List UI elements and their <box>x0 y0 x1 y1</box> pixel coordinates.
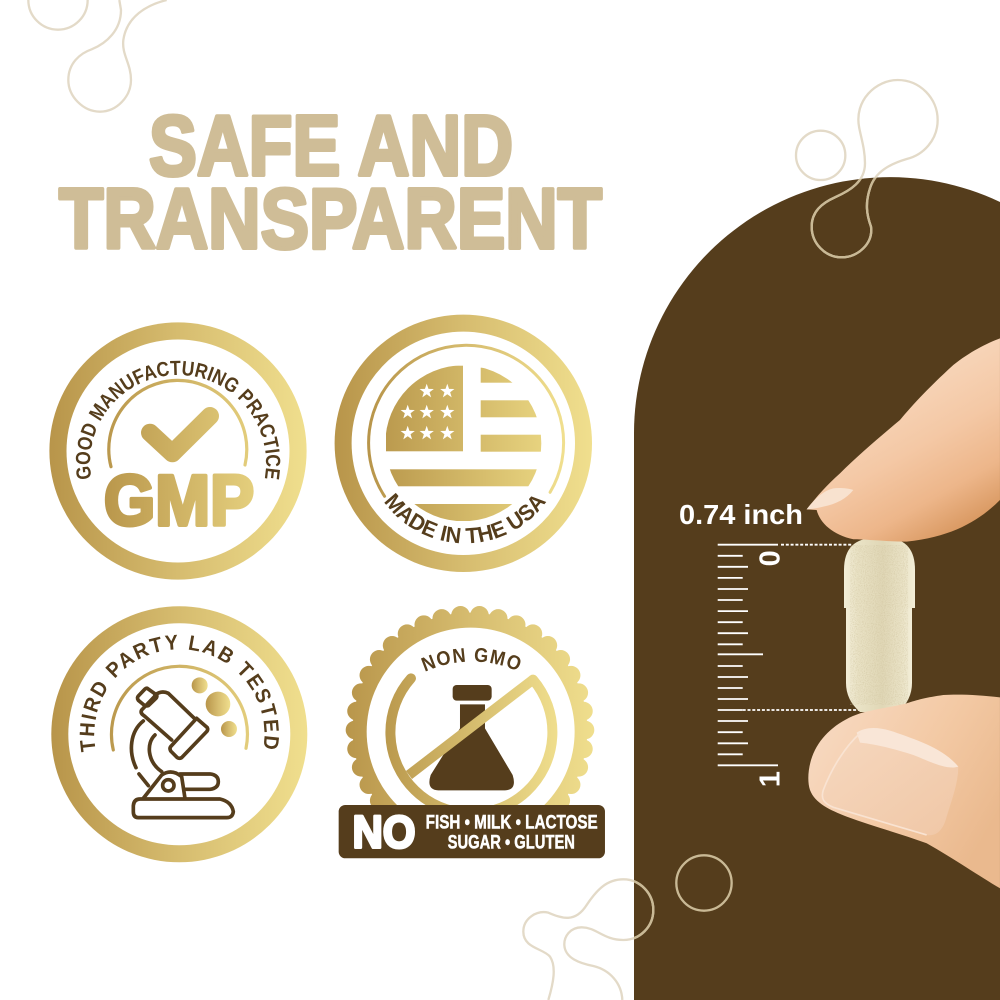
prohibition slash <box>409 680 533 775</box>
ruler number 1: 1 <box>754 771 786 787</box>
GMP letters: GMP <box>104 462 254 541</box>
badge: GMP <box>49 322 307 580</box>
capsule body <box>846 600 912 712</box>
capsule texture <box>850 545 908 705</box>
ruler number 0: 0 <box>754 550 786 566</box>
icon: check mark <box>150 416 210 453</box>
thin arc <box>111 666 247 750</box>
thin arc <box>369 345 564 496</box>
gold ring <box>49 322 307 580</box>
bottom finger <box>808 695 1000 888</box>
fingernail <box>807 488 853 509</box>
icon: flag <box>380 366 550 521</box>
capsule cap <box>844 538 915 608</box>
heading: TRANSPARENT <box>59 172 602 267</box>
curved label: GOOD MANUFACTURING PRACTICE <box>76 360 280 480</box>
decorative squiggles top left <box>28 0 167 112</box>
icon: gold bubbles <box>192 677 237 737</box>
nail highlight <box>857 728 958 768</box>
badge: non GMO <box>338 606 605 858</box>
curved label: MADE IN THE USA <box>384 492 546 544</box>
icon: microscope <box>131 688 233 818</box>
badge: made in the USA <box>334 314 592 572</box>
heading <box>59 99 602 267</box>
inner disc <box>66 340 290 562</box>
measurement label: 0.74 inch <box>679 499 803 530</box>
squiggle overlay on arch <box>634 178 877 940</box>
inner disc <box>68 623 290 845</box>
scalloped seal <box>346 606 594 805</box>
prohibition ring <box>390 678 552 813</box>
flag stars <box>401 384 454 439</box>
curved label: THIRD PARTY LAB TESTED <box>80 634 279 752</box>
capsule <box>844 538 915 712</box>
finger shape <box>808 695 1000 888</box>
icon: flask <box>429 685 514 790</box>
banner list line 1: FISH • MILK • LACTOSE <box>426 812 598 833</box>
badge: third party lab tested <box>51 606 308 862</box>
nail rim <box>822 733 927 835</box>
top finger <box>807 338 1000 542</box>
decorative squiggles bottom <box>523 855 732 1000</box>
heading: SAFE AND <box>149 99 513 194</box>
decorative squiggles top right <box>796 80 938 257</box>
panel: dark arch <box>634 177 1000 1000</box>
finger shape <box>807 338 1000 542</box>
thin arc <box>109 380 247 467</box>
ruler <box>718 545 862 765</box>
banner NO: NO <box>353 806 415 857</box>
banner list line 2: SUGAR • GLUTEN <box>448 832 575 853</box>
gold ring <box>335 315 592 572</box>
banner <box>339 805 605 858</box>
fingernail <box>822 731 958 835</box>
curved label: NON GMO <box>421 648 520 672</box>
gold ring <box>51 606 307 862</box>
inner disc <box>352 332 575 555</box>
